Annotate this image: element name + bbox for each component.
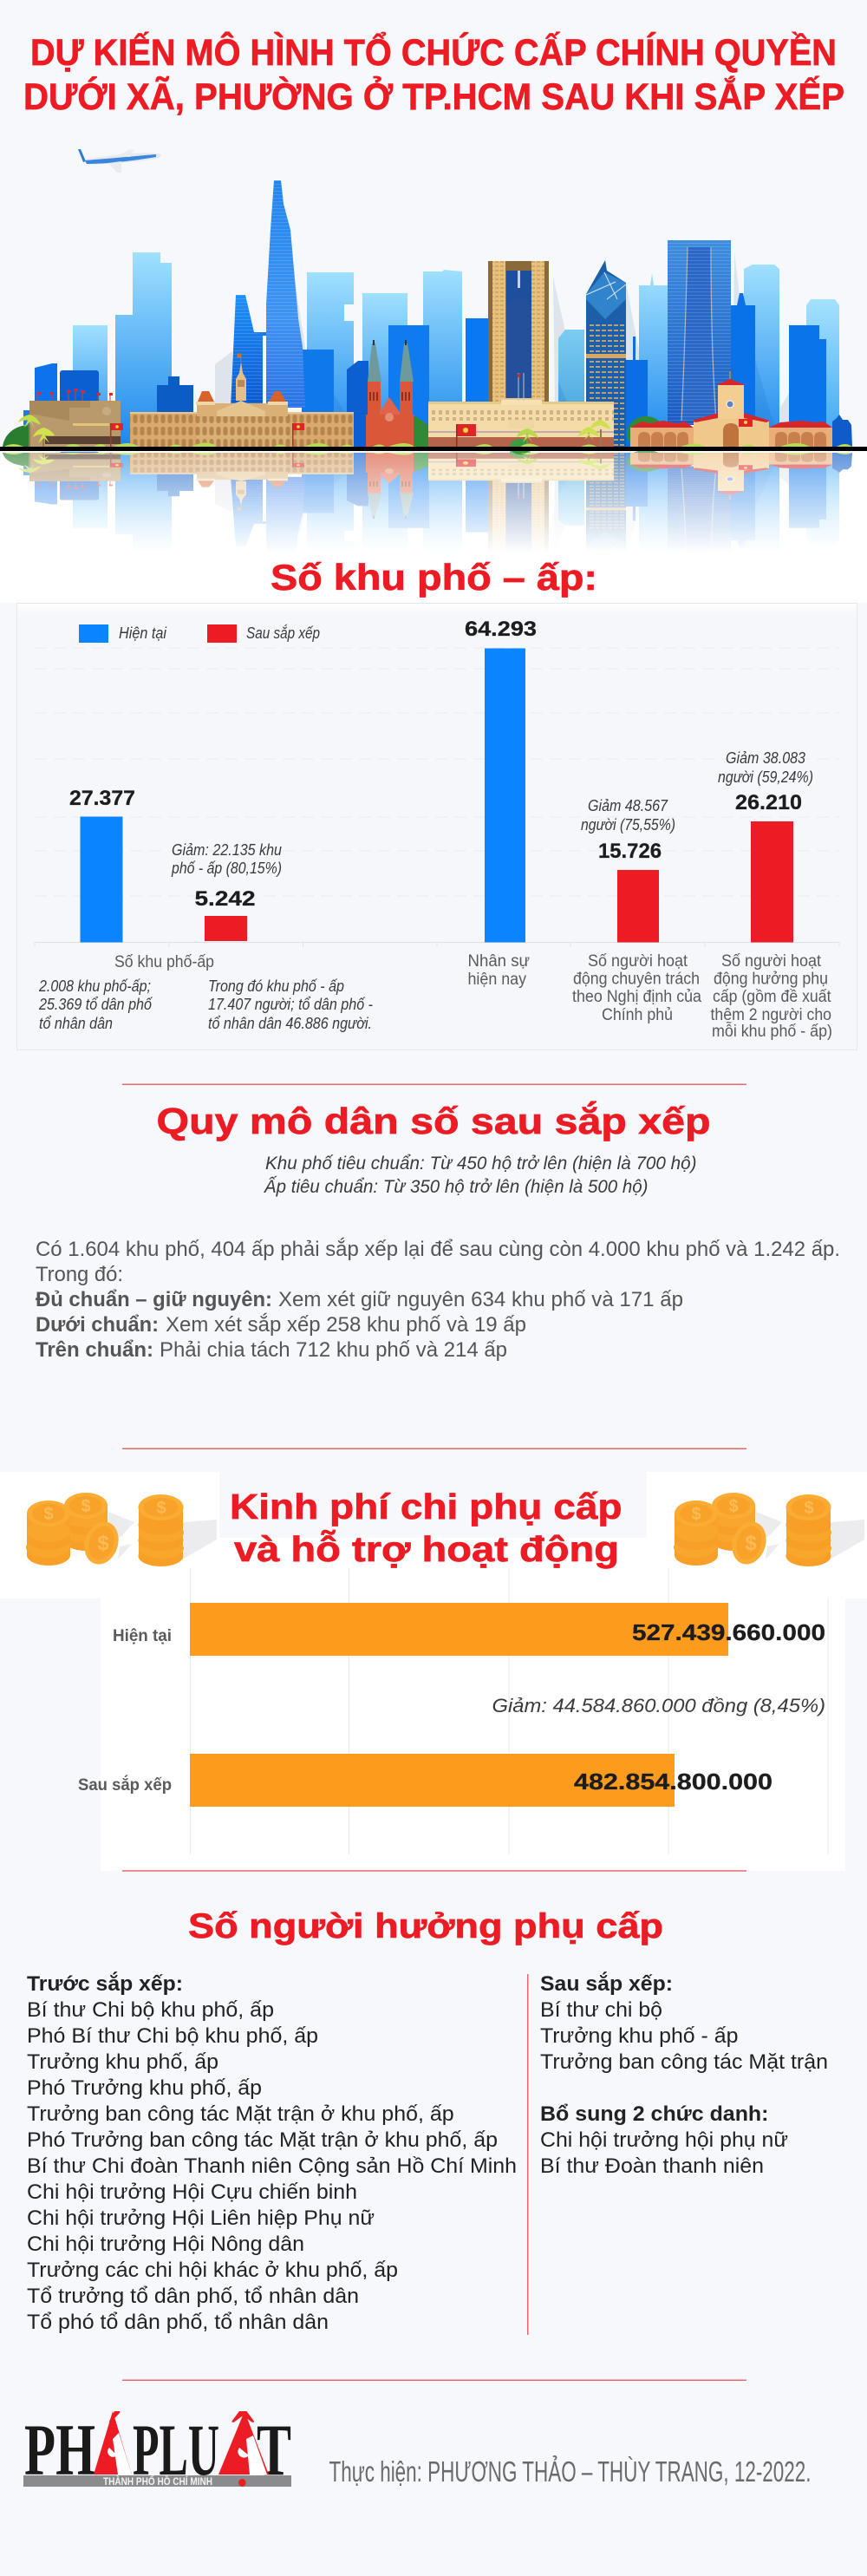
axis label: Số khu phố-ấp: tổ nhân dân 46.886 người. xyxy=(208,1015,372,1032)
text block: sau sắp xếp: Bổ sung 2 chức danh: xyxy=(540,2102,768,2126)
text block: sau sắp xếp: Sau sắp xếp: xyxy=(540,1971,673,1996)
bar: hiện tại: Hiện tại xyxy=(113,1627,172,1645)
text block: sắp xếp khu phố xyxy=(36,1238,840,1362)
flag xyxy=(739,419,753,427)
bar: hưởng phụ cấp: Giảm 38.083 xyxy=(726,749,805,767)
text block: sau sắp xếp: Chi hội trưởng hội phụ nữ xyxy=(540,2128,788,2152)
flag xyxy=(292,423,304,447)
icon: coins right xyxy=(674,1493,864,1569)
text block: tiêu chuẩn xyxy=(263,1154,697,1197)
text block: sau sắp xếp: Bí thư Đoàn thanh niên xyxy=(540,2154,764,2178)
tower: financial xyxy=(668,240,731,425)
heading: Quy mô dân số: Quy mô dân số sau sắp xếp xyxy=(156,1100,711,1141)
blue mid towers xyxy=(35,293,826,448)
text block: trước sắp xếp: Chi hội trưởng Hội Nông dân xyxy=(27,2233,304,2256)
bar: sau sắp xếp: Sau sắp xếp xyxy=(78,1775,172,1795)
text block: trước sắp xếp: Chi hội trưởng Hội Cựu chiến binh xyxy=(27,2180,357,2204)
legend: Sau sắp xếp xyxy=(246,624,320,642)
logo: Pháp Luật: Ậ xyxy=(218,2409,269,2491)
bar: hưởng phụ cấp xyxy=(718,749,813,942)
axis label: Số khu phố-ấp: 2.008 khu phố-ấp; xyxy=(38,977,151,995)
axis label: Nhân sự hiện nay: Nhân sự xyxy=(468,952,530,971)
bar: hiện tại xyxy=(113,1603,825,1656)
axis label: hưởng phụ cấp: mỗi khu phố - ấp) xyxy=(712,1022,832,1041)
text block: tiêu chuẩn: Khu phố tiêu chuẩn: Từ 450 hộ trở lên (hiện là 700 hộ) xyxy=(265,1154,697,1174)
bar: chuyên trách xyxy=(581,797,675,942)
heading: Kinh phí chi phụ cấp: Kinh phí chi phụ cấp xyxy=(230,1487,623,1527)
text block: sắp xếp khu phố: Xem xét giữ nguyên 634 khu phố và 171 ấp xyxy=(278,1288,683,1311)
bar: sau sắp xếp xyxy=(78,1754,772,1807)
bar: chuyên trách: 15.726 xyxy=(598,840,662,863)
bar: hưởng phụ cấp: người (59,24%) xyxy=(718,768,813,786)
text block: trước sắp xếp: Tổ trưởng tổ dân phố, tổ nhân dân xyxy=(27,2285,359,2308)
building: Ben Thanh market xyxy=(627,371,832,451)
text block: sắp xếp khu phố: Đủ chuẩn – giữ nguyên: xyxy=(36,1288,272,1311)
white backdrop below the skyline xyxy=(0,451,867,603)
heading: Kinh phí chi phụ cấp xyxy=(230,1487,623,1569)
green hill left xyxy=(3,410,35,447)
bar: Số khu phố-ấp hiện tại: 27.377 xyxy=(69,787,135,810)
tower: diamond roof xyxy=(586,260,626,447)
building: independence palace xyxy=(428,373,614,447)
axis label: chuyên trách: Số người hoạt xyxy=(588,952,688,971)
text block: trước sắp xếp: Trưởng các chi hội khác ở khu phố, ấp xyxy=(27,2259,398,2282)
axis label: chuyên trách: theo Nghị định của xyxy=(572,988,701,1006)
icon: airplane xyxy=(78,149,161,173)
hedges xyxy=(4,442,852,447)
bar: hưởng phụ cấp: 26.210 xyxy=(735,791,802,814)
building: city hall xyxy=(130,354,354,447)
chart grid xyxy=(191,1568,828,1854)
text block: trước sắp xếp: Tổ phó tổ dân phố, tổ nhân dân xyxy=(27,2311,329,2334)
text block: trước sắp xếp: Bí thư Chi bộ khu phố, ấp xyxy=(27,1998,274,2022)
title xyxy=(23,30,844,118)
bar: chuyên trách: Giảm 48.567 xyxy=(588,797,668,814)
text block: trước sắp xếp: Chi hội trưởng Hội Liên hiệp Phụ nữ xyxy=(27,2207,375,2230)
axis label: Số khu phố-ấp: Số khu phố-ấp xyxy=(114,953,214,971)
text block: sắp xếp khu phố: Xem xét sắp xếp 258 khu phố và 19 ấp xyxy=(166,1313,526,1337)
text block: trước sắp xếp: Phó Bí thư Chi bộ khu phố, ấp xyxy=(27,2024,318,2048)
axis label: Số khu phố-ấp: Trong đó khu phố - ấp xyxy=(208,977,344,995)
axis label: Số khu phố-ấp: tổ nhân dân xyxy=(39,1015,113,1032)
axis label: chuyên trách: Chính phủ xyxy=(602,1006,673,1024)
axis label: hưởng phụ cấp xyxy=(711,952,832,1041)
icon: coins left: $ xyxy=(81,1497,91,1516)
text block: tiêu chuẩn: Ấp tiêu chuẩn: Từ 350 hộ trở lên (hiện là 500 hộ) xyxy=(263,1176,649,1197)
panel: bar chart kinh phí xyxy=(78,1568,845,1871)
building: left hall xyxy=(29,389,121,447)
legend: Hiện tại xyxy=(119,624,167,642)
light background towers xyxy=(73,252,839,447)
panel: khu phố bar chart xyxy=(17,604,857,1049)
bar: Nhân sự hiện nay: 64.293 xyxy=(465,618,537,641)
text block: sắp xếp khu phố: Có 1.604 khu phố, 404 ấp phải sắp xếp lại để sau cùng còn 4.000 khu phố và 1.242 ấp. xyxy=(36,1238,840,1261)
bar: Số khu phố-ấp hiện tại xyxy=(69,787,135,942)
reflection of skyline xyxy=(3,451,852,548)
icon: coins left xyxy=(26,1493,217,1569)
icon: palm trees xyxy=(18,415,55,447)
flag xyxy=(456,424,476,447)
bar: Nhân sự hiện nay xyxy=(465,618,537,942)
axis label: chuyên trách xyxy=(572,952,701,1024)
bar: chuyên trách: người (75,55%) xyxy=(581,816,675,834)
text block: sau sắp xếp: Bí thư chi bộ xyxy=(540,1998,662,2022)
text block: trước sắp xếp: Trưởng ban công tác Mặt trận ở khu phố, ấp xyxy=(27,2102,454,2126)
building shadows xyxy=(215,180,799,425)
tower: Bitexco xyxy=(231,295,271,408)
tower: gold xyxy=(488,261,549,408)
panel: coin banner background xyxy=(0,1472,867,1599)
axis label: Số khu phố-ấp: 25.369 tổ dân phố xyxy=(38,996,153,1013)
icon: coins left: $ xyxy=(156,1499,166,1518)
text block: trước sắp xếp: Trưởng khu phố, ấp xyxy=(27,2050,218,2074)
icon: coins left: $ xyxy=(43,1505,54,1524)
legend xyxy=(79,624,320,643)
logo: Pháp Luật: Á xyxy=(94,2409,132,2491)
building: Notre-Dame cathedral xyxy=(366,340,414,447)
bar: hiện tại: 527.439.660.000 xyxy=(632,1619,825,1645)
text block: sắp xếp khu phố: Trong đó: xyxy=(36,1263,123,1286)
text block: sắp xếp khu phố: Dưới chuẩn: xyxy=(36,1313,159,1337)
axis label: Số khu phố-ấp xyxy=(38,953,373,1032)
icon: palms at palace xyxy=(510,420,610,454)
building: hill behind palace xyxy=(414,416,431,447)
heading: Số khu phố – ấp: Số khu phố – ấp: xyxy=(271,557,597,598)
tower: Landmark 81 xyxy=(266,180,305,408)
text block: trước sắp xếp xyxy=(27,1971,517,2334)
chart grid xyxy=(35,648,839,896)
chart axis xyxy=(35,942,839,947)
logo: Pháp Luật: PH xyxy=(24,2409,95,2491)
axis label: hưởng phụ cấp: Số người hoạt xyxy=(721,952,822,971)
text block: trước sắp xếp: Phó Trưởng khu phố, ấp xyxy=(27,2076,262,2100)
text block: trước sắp xếp: Bí thư Chi đoàn Thanh niên Cộng sản Hồ Chí Minh xyxy=(27,2154,517,2178)
logo: Pháp Luật: T xyxy=(257,2409,291,2491)
text block: trước sắp xếp: Trước sắp xếp: xyxy=(27,1971,183,1996)
flag xyxy=(110,423,123,447)
bar: sau sắp xếp: 482.854.800.000 xyxy=(574,1769,772,1795)
bar: Số khu phố-ấp sau sắp xếp: Giảm: 22.135 khu xyxy=(172,841,282,859)
text block: trước sắp xếp: Phó Trưởng ban công tác Mặt trận ở khu phố, ấp xyxy=(27,2128,498,2152)
angled facade shadows xyxy=(307,321,780,447)
bar: Số khu phố-ấp sau sắp xếp xyxy=(171,841,282,941)
text block: sắp xếp khu phố: Trên chuẩn: xyxy=(36,1338,153,1362)
logo: Pháp Luật: THÀNH PHỐ HỒ CHÍ MINH xyxy=(103,2475,212,2488)
skyline illustration xyxy=(3,180,852,454)
heading: Kinh phí chi phụ cấp: và hỗ trợ hoạt động xyxy=(234,1529,619,1569)
axis label: chuyên trách: động chuyên trách xyxy=(573,970,700,989)
axis label: Nhân sự hiện nay xyxy=(468,952,530,989)
logo: Pháp Luật xyxy=(23,2409,291,2491)
text block: sắp xếp khu phố: Phải chia tách 712 khu phố và 214 ấp xyxy=(160,1338,507,1362)
icon: coins left: $ xyxy=(97,1532,109,1555)
axis label: Nhân sự hiện nay: hiện nay xyxy=(468,971,526,989)
axis label: hưởng phụ cấp: cấp (gồm đề xuất xyxy=(713,988,831,1006)
text block: sau sắp xếp: Trưởng khu phố - ấp xyxy=(540,2024,738,2048)
horizon line xyxy=(0,447,867,451)
bar: Số khu phố-ấp sau sắp xếp: phố - ấp (80,15%) xyxy=(171,860,282,877)
building: far-right silhouette xyxy=(832,415,852,447)
text block: sau sắp xếp xyxy=(540,1971,828,2178)
axis label: hưởng phụ cấp: động hưởng phụ xyxy=(714,970,828,989)
axis label: hưởng phụ cấp: thêm 2 người cho xyxy=(711,1006,831,1024)
bar: Số khu phố-ấp sau sắp xếp: 5.242 xyxy=(194,887,255,911)
heading: Số người hưởng phụ cấp: Số người hưởng phụ cấp xyxy=(188,1907,663,1945)
logo: Pháp Luật: PLU xyxy=(133,2409,219,2491)
callout: giảm: Giảm: 44.584.860.000 đồng (8,45%) xyxy=(492,1695,825,1716)
text block: sau sắp xếp: Trưởng ban công tác Mặt trận xyxy=(540,2050,828,2074)
axis label: Số khu phố-ấp: 17.407 người; tổ dân phố - xyxy=(208,996,373,1013)
